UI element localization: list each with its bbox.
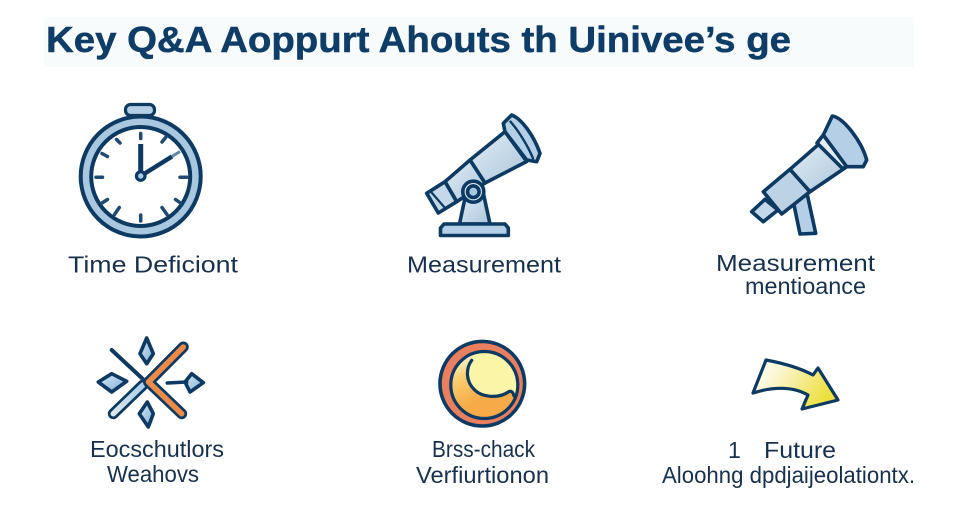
label: Eocschutlors <box>90 436 224 462</box>
panel: cross-check verification <box>416 341 549 488</box>
panel: measurement mentioance <box>716 116 876 299</box>
label: Future <box>764 437 836 463</box>
label: Measurement <box>407 252 562 278</box>
panel: future <box>662 360 915 488</box>
panel: time deficiont <box>68 104 239 278</box>
icon: telescope on leg <box>752 116 867 234</box>
label: Measurement <box>716 250 876 276</box>
panel: measurement <box>407 115 562 278</box>
infographic canvas <box>48 25 913 488</box>
icon: circular sun <box>440 341 530 426</box>
title: Key Q&A Aoppurt Ahouts th Uinivee’s ge <box>46 19 791 60</box>
icon: telescope on mount <box>427 115 540 236</box>
icon: curved arrow <box>753 360 838 409</box>
panel: eocschutlors weahovs <box>90 338 224 487</box>
label: Aloohng dpdjaijeolationtx. <box>662 462 915 488</box>
icon: stopwatch <box>81 104 201 236</box>
label: Brss-chack <box>432 436 535 462</box>
label: 1 <box>728 437 741 463</box>
title band <box>44 17 914 67</box>
label: Weahovs <box>107 461 199 487</box>
label: mentioance <box>745 273 866 299</box>
label: Verfiurtionon <box>416 462 549 488</box>
label: Time Deficiont <box>68 252 239 278</box>
icon: crossed arms with diamonds <box>98 338 203 427</box>
